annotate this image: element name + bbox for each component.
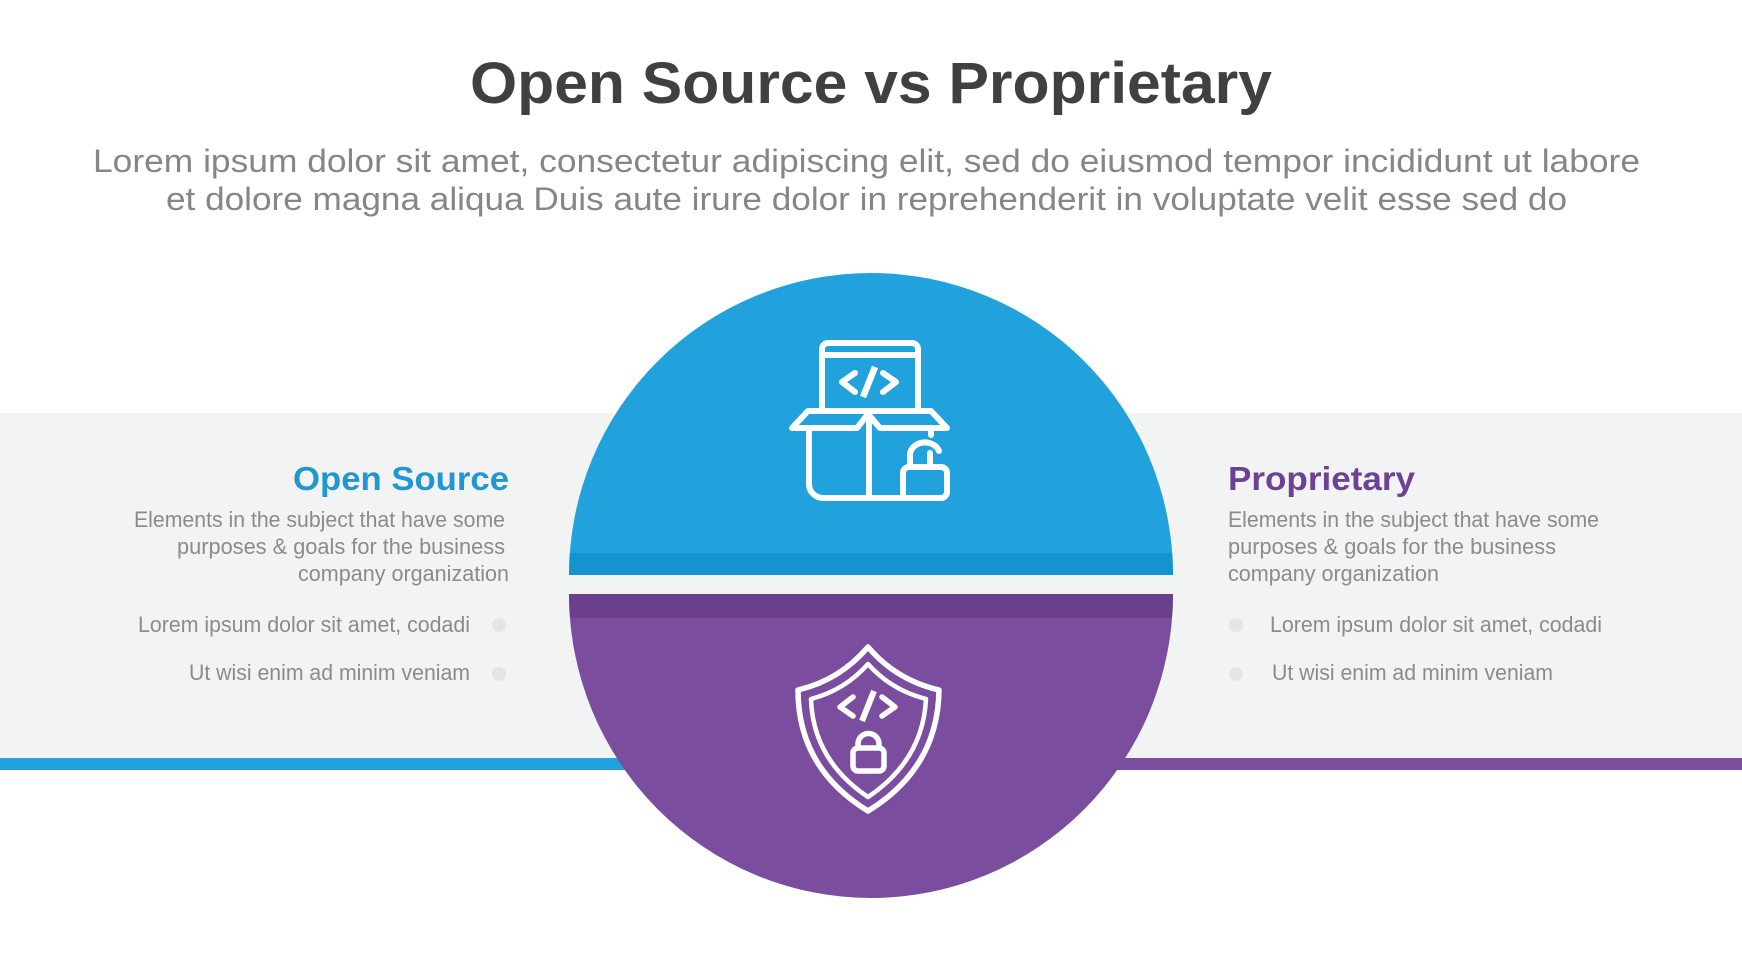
- description: open source: Elements in the subject that have some: [134, 507, 505, 532]
- bullet item 2: Ut wisi enim ad minim veniam: [1272, 660, 1553, 685]
- description: proprietary: company organization: [1228, 561, 1439, 586]
- description: proprietary: Elements in the subject that have some: [1228, 507, 1599, 532]
- left accent bar: [0, 758, 640, 770]
- bottom semicircle: proprietary: [569, 594, 1173, 898]
- description: open source: purposes & goals for the business: [177, 534, 505, 559]
- icon: open box with code window and unlocked padlock: [792, 343, 947, 498]
- top semicircle: open source: [569, 273, 1173, 575]
- subtitle text: et dolore magna aliqua Duis aute irure dolor in reprehenderit in voluptate velit esse sed do: [166, 181, 1567, 217]
- description: open source: company organization: [298, 561, 509, 586]
- bullet item 1: Lorem ipsum dolor sit amet, codadi: [138, 612, 470, 637]
- title: Open Source vs Proprietary: [470, 51, 1272, 116]
- heading: proprietary: Proprietary: [1228, 460, 1416, 497]
- right accent bar: [1100, 758, 1742, 770]
- bullet item 1: Lorem ipsum dolor sit amet, codadi: [1270, 612, 1602, 637]
- description: proprietary: [1228, 507, 1599, 586]
- icon: shield with code symbol and padlock: [798, 647, 939, 811]
- description: open source: [134, 507, 509, 586]
- subtitle text: [93, 143, 1640, 217]
- background band: [0, 413, 1742, 759]
- description: proprietary: purposes & goals for the business: [1228, 534, 1556, 559]
- heading: open source: Open Source: [293, 460, 509, 497]
- panel: proprietary text: [1228, 460, 1602, 685]
- bullet item 2: Ut wisi enim ad minim veniam: [189, 660, 470, 685]
- panel: open source text: [134, 460, 509, 685]
- subtitle text: Lorem ipsum dolor sit amet, consectetur adipiscing elit, sed do eiusmod tempor incididunt ut labore: [93, 143, 1640, 179]
